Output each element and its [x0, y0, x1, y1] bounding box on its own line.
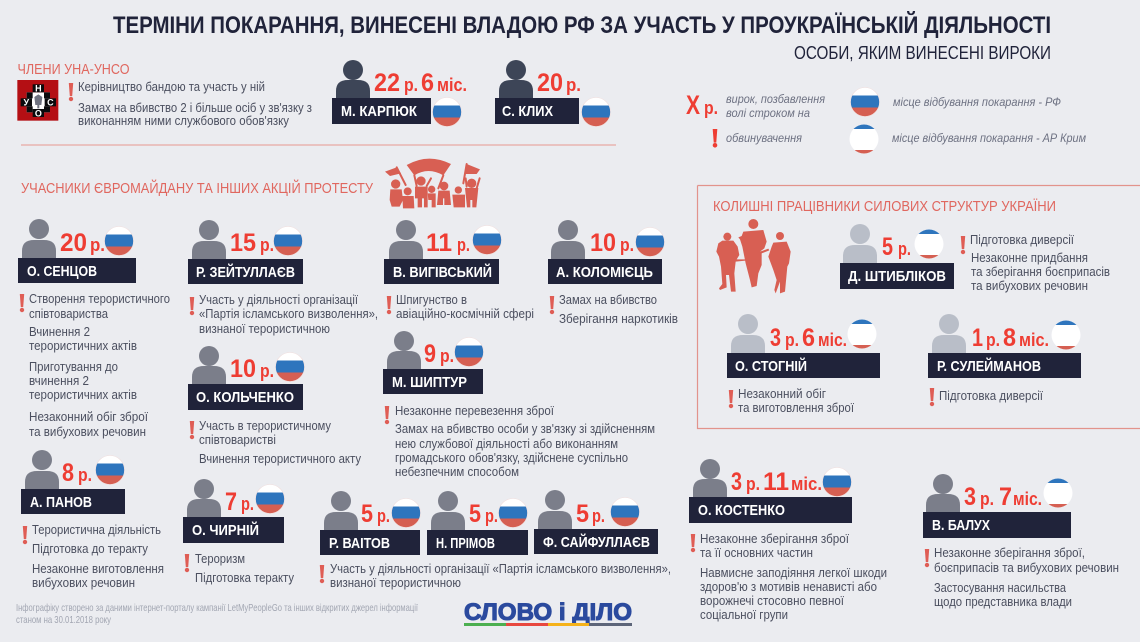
person: Kolomiiets: р.: [620, 235, 634, 255]
legend: місце відбування покарання - АР Крим: [892, 131, 1086, 145]
person: Karpiuk: [332, 60, 467, 128]
person: Chyrnii: 7: [225, 488, 237, 516]
person: Balukh: Застосування насильства: [934, 581, 1066, 595]
charges: UNA-UNSO: виконанням ними службового обов'язку: [78, 114, 290, 128]
person: Shtyblikov: р.: [898, 239, 911, 259]
icon: soldiers: [716, 219, 791, 293]
person: Klykh: С. КЛИХ: [502, 103, 553, 120]
person: Kostenko: 3: [731, 468, 742, 496]
person: Kolchenko: співтоваристві: [199, 433, 276, 447]
person: Primov: р.: [485, 506, 498, 526]
person: Panov: Підготовка до теракту: [32, 542, 149, 556]
person: Vyhivskyi: В. ВИГІВСЬКИЙ: [393, 263, 492, 281]
person: Chyrnii: Підготовка теракту: [195, 571, 295, 585]
person: Primov: Н. ПРІМОВ: [436, 535, 495, 552]
person: Kolomiiets: А. КОЛОМІЄЦЬ: [556, 264, 653, 281]
legend: місце відбування покарання - РФ: [893, 95, 1061, 109]
person: Kolomiiets: Замах на вбивство: [559, 293, 657, 307]
person: Shyptur: Незаконне перевезення зброї: [395, 404, 554, 418]
person: Balukh: 3: [964, 483, 976, 511]
person: Shtyblikov: [840, 224, 1110, 293]
icon: UNA-UNSO logo: С: [47, 98, 54, 108]
person: Kostenko: [689, 459, 887, 622]
person: Karpiuk: 6: [421, 69, 434, 97]
person: Kolomiiets: 10: [590, 229, 616, 257]
person: Suleimanov: 1: [972, 324, 983, 352]
person: Balukh: щодо представника влади: [934, 595, 1072, 609]
charges: UNA-UNSO: [69, 80, 312, 128]
charges: UNA-UNSO: Замах на вбивство 2 і більше осіб у зв'язку з: [78, 101, 312, 115]
person: Sentsov: [18, 219, 170, 439]
section heading: former officers: КОЛИШНІ ПРАЦІВНИКИ СИЛОВИХ СТРУКТУР УКРАЇНИ: [713, 198, 1056, 215]
person: Chyrnii: Тероризм: [195, 552, 245, 566]
person: Panov: вибухових речовин: [32, 576, 135, 590]
person: Saifullaiev: Ф. САЙФУЛЛАЄВ: [543, 533, 650, 551]
person: Shyptur: р.: [440, 346, 454, 366]
person: Kostenko: та її основних частин: [700, 546, 813, 560]
person: Balukh: В. БАЛУХ: [932, 517, 990, 534]
person: Panov: р.: [78, 465, 92, 485]
charges: shared by Vaitov, Primov, Saifullaiev: визнаної терористичною: [330, 576, 461, 590]
person: Panov: [21, 450, 164, 590]
person: Suleimanov: Р. СУЛЕЙМАНОВ: [937, 357, 1041, 375]
person: Shtyblikov: Підготовка диверсії: [970, 233, 1074, 247]
section heading: UNA-UNSO members: ЧЛЕНИ УНА-УНСО: [18, 62, 130, 78]
person: Stohnii: [727, 314, 880, 415]
icon: protesters with banner: [385, 159, 480, 208]
person: Vaitov: [320, 491, 421, 555]
person: Vaitov: р.: [377, 506, 390, 526]
legend: Х: [686, 90, 700, 120]
person: Sentsov: вчинення 2: [29, 374, 89, 388]
person: Primov: [427, 491, 528, 555]
person: Zeitullaiev: «Партія ісламського визволення»,: [199, 307, 378, 321]
person: Zeitullaiev: Участь у діяльності організації: [199, 293, 358, 307]
person: Panov: Незаконне виготовлення: [32, 562, 164, 576]
charges: UNA-UNSO: Керівництво бандою та участь у ній: [78, 80, 265, 94]
person: Sentsov: терористичних актів: [29, 388, 137, 402]
source note: Інфографіку створено за даними інтернет-порталу кампанії LetMyPeopleGo та інших відкритих джерел інформації: [16, 602, 418, 614]
person: Suleimanov: [928, 314, 1081, 406]
person: Stohnii: 3: [770, 324, 781, 352]
icon: UNA-UNSO logo: У: [24, 98, 30, 108]
legend: вирок, позбавлення: [726, 92, 826, 106]
person: Sentsov: 20: [60, 229, 87, 257]
panel: former security officers: [698, 186, 1140, 428]
person: Vaitov: Р. ВАІТОВ: [329, 535, 390, 552]
person: Kolchenko: Вчинення терористичного акту: [199, 452, 362, 466]
person: Stohnii: О. СТОГНІЙ: [735, 357, 807, 375]
person: Karpiuk: М. КАРПЮК: [341, 103, 418, 120]
person: Shyptur: нею службової діяльності або виконанням: [395, 437, 618, 451]
subtitle: ОСОБИ, ЯКИМ ВИНЕСЕНІ ВИРОКИ: [794, 43, 1051, 63]
person: Panov: 8: [62, 459, 74, 487]
person: Sentsov: р.: [90, 235, 105, 255]
person: Sentsov: Приготування до: [29, 360, 118, 374]
person: Kolomiiets: Зберігання наркотиків: [559, 312, 678, 326]
person: Panov: А. ПАНОВ: [30, 494, 92, 511]
person: Karpiuk: р.: [404, 75, 418, 95]
person: Suleimanov: Підготовка диверсії: [939, 389, 1043, 403]
person: Vyhivskyi: авіаційно-космічній сфері: [396, 307, 534, 321]
person: Balukh: р.: [980, 489, 994, 509]
person: Saifullaiev: [534, 490, 658, 554]
person: Stohnii: та виготовлення зброї: [738, 401, 854, 415]
person: Sentsov: Незаконний обіг зброї: [29, 410, 148, 424]
person: Kolchenko: Участь в терористичному: [199, 419, 332, 433]
person: Kostenko: Навмисне заподіяння легкої шкоди: [700, 566, 887, 580]
person: Suleimanov: р.: [986, 330, 1000, 350]
person: Kolchenko: [188, 346, 362, 466]
person: Stohnii: 6: [802, 324, 815, 352]
person: Sentsov: співтовариства: [29, 307, 108, 321]
source note: станом на 30.01.2018 року: [16, 614, 112, 626]
source note: [16, 602, 418, 626]
person: Vaitov: 5: [361, 500, 373, 528]
legend: волі строком на: [726, 106, 810, 120]
person: Karpiuk: міс.: [437, 75, 467, 95]
person: Shyptur: [383, 331, 655, 479]
person: Kostenko: 11: [763, 468, 789, 496]
icon: UNA-UNSO logo: О: [35, 108, 42, 118]
person: Suleimanov: 8: [1003, 324, 1016, 352]
person: Sentsov: Створення терористичного: [29, 292, 170, 306]
person: Shtyblikov: Д. ШТИБЛІКОВ: [848, 268, 946, 285]
person: Kolchenko: 10: [230, 355, 256, 383]
person: Suleimanov: міс.: [1019, 330, 1049, 350]
person: Balukh: [923, 474, 1119, 609]
person: Panov: Терористична діяльність: [32, 523, 161, 537]
legend: обвинувачення: [726, 131, 803, 145]
person: Zeitullaiev: [188, 220, 378, 336]
person: Kolchenko: О. КОЛЬЧЕНКО: [196, 389, 294, 406]
person: Saifullaiev: 5: [576, 500, 589, 528]
person: Balukh: міс.: [1013, 489, 1042, 509]
person: Shyptur: громадського обов'язку, здійснене суспільно: [395, 451, 628, 465]
person: Balukh: боєприпасів та вибухових речовин: [934, 561, 1119, 575]
person: Zeitullaiev: 15: [230, 229, 256, 257]
icon: UNA-UNSO logo: Н: [35, 84, 42, 94]
person: Balukh: 7: [999, 483, 1012, 511]
person: Shyptur: небезпечним способом: [395, 465, 519, 479]
logo: Slovo i Dilo: СЛОВО і ДІЛО: [464, 599, 632, 626]
person: Vyhivskyi: 11: [426, 229, 452, 257]
person: Sentsov: та вибухових речовин: [29, 425, 146, 439]
person: Stohnii: р.: [785, 330, 799, 350]
person: Kolomiiets: [548, 220, 678, 326]
person: Vyhivskyi: [384, 220, 534, 321]
person: Chyrnii: О. ЧИРНІЙ: [192, 521, 259, 539]
person: Zeitullaiev: Р. ЗЕЙТУЛЛАЄВ: [196, 263, 295, 281]
person: Shtyblikov: Незаконне придбання: [971, 251, 1088, 265]
person: Stohnii: Незаконний обіг: [738, 387, 826, 401]
person: Kostenko: здоров'ю з мотивів ненависті або: [700, 580, 877, 594]
person: Primov: 5: [469, 500, 481, 528]
person: Shtyblikov: та вибухових речовин: [971, 279, 1088, 293]
person: Shtyblikov: 5: [882, 233, 893, 261]
person: Karpiuk: 22: [374, 69, 400, 97]
charges: shared by Vaitov, Primov, Saifullaiev: [320, 562, 671, 590]
person: Kostenko: р.: [746, 474, 760, 494]
person: Balukh: Незаконне зберігання зброї,: [934, 546, 1085, 560]
person: Kostenko: Незаконне зберігання зброї: [700, 532, 849, 546]
legend: р.: [704, 98, 718, 118]
person: Stohnii: міс.: [818, 330, 847, 350]
person: Chyrnii: [183, 479, 295, 585]
person: Klykh: р.: [566, 75, 581, 95]
person: Shtyblikov: та зберігання боєприпасів: [971, 265, 1110, 279]
person: Kostenko: міс.: [791, 474, 822, 494]
section heading: Euromaidan participants: УЧАСНИКИ ЄВРОМАЙДАНУ ТА ІНШИХ АКЦІЙ ПРОТЕСТУ: [21, 179, 374, 197]
person: Sentsov: Вчинення 2: [29, 325, 90, 339]
person: Chyrnii: р.: [241, 494, 254, 514]
person: Saifullaiev: р.: [592, 506, 605, 526]
person: Vyhivskyi: Шпигунство в: [396, 293, 467, 307]
person: Shyptur: Замах на вбивство особи у зв'язку зі здійсненням: [395, 422, 655, 436]
person: Shyptur: М. ШИПТУР: [392, 374, 467, 391]
person: Kostenko: соціальної групи: [700, 608, 788, 622]
icon: UNA-UNSO logo: [17, 80, 58, 121]
person: Vyhivskyi: р.: [457, 235, 470, 255]
person: Zeitullaiev: р.: [260, 235, 274, 255]
legend: [686, 87, 1086, 154]
person: Klykh: [495, 60, 611, 128]
person: Klykh: 20: [537, 69, 563, 97]
person: Shyptur: 9: [424, 340, 436, 368]
charges: shared by Vaitov, Primov, Saifullaiev: Участь у діяльності організації «Партія ісламського визволення»,: [330, 562, 671, 576]
person: Zeitullaiev: визнаної терористичною: [199, 322, 330, 336]
person: Kostenko: ворожнечі стосовно певної: [700, 594, 844, 608]
person: Kostenko: О. КОСТЕНКО: [698, 502, 785, 519]
person: Sentsov: терористичних актів: [29, 339, 137, 353]
person: Kolchenko: р.: [260, 361, 274, 381]
person: Sentsov: О. СЕНЦОВ: [27, 263, 97, 280]
